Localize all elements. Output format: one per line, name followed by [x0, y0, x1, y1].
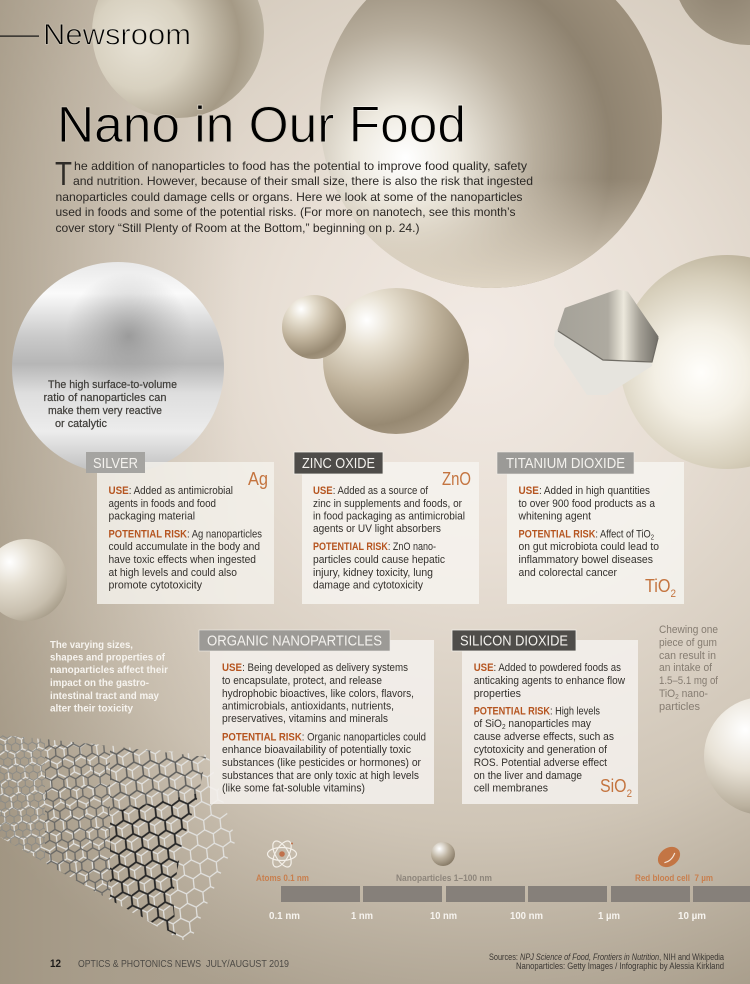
heading: silicon dioxide [452, 630, 576, 651]
text: titanium dioxide use and risk: inflammatory bowel diseases [518, 554, 653, 566]
callout: surface-to-volume: make them very reactive [48, 405, 162, 417]
text: zinc oxide use and risk: in food packaging as antimicrobial [313, 510, 465, 522]
callout: chewing gum: Chewing one [659, 624, 718, 636]
icon: nanoparticle [431, 842, 455, 866]
scale bar [281, 886, 750, 902]
text: silver use and risk: could accumulate in the body and [108, 541, 260, 553]
heading: titanium dioxide: TITANIUM DIOXIDE [506, 456, 625, 472]
text: silicon dioxide use and risk: on the liver and damage [474, 770, 582, 782]
text: silver use and risk: POTENTIAL RISK: Ag nanoparticles [108, 528, 262, 540]
callout: chewing gum: TiO [659, 688, 676, 700]
text: silicon dioxide use and risk [474, 662, 625, 794]
label: atoms: Atoms 0.1 nm [256, 873, 309, 884]
heading: silver [86, 452, 145, 473]
sphere: top right corner [673, 0, 750, 45]
text: organic use and risk [222, 662, 426, 794]
text: organic use and risk: to encapsulate, protect, and release [222, 675, 382, 687]
text: silicon dioxide use and risk: properties [474, 688, 521, 700]
text: organic use and risk: hydrophobic bioactives, like colors, flavors, [222, 688, 414, 700]
text: silver use and risk: USE: Added as antimicrobial [108, 485, 233, 497]
callout: chewing gum: can result in [659, 650, 716, 662]
folio: 12 [50, 958, 61, 970]
heading: silicon dioxide: SILICON DIOXIDE [460, 634, 568, 650]
symbol: TiO2: 2 [670, 588, 676, 600]
callout: varying sizes: The varying sizes, [50, 639, 133, 651]
symbol: TiO2: TiO [645, 576, 673, 596]
folio: OPTICS & PHOTONICS NEWS [78, 959, 201, 970]
symbol: Ag: Ag [248, 469, 268, 489]
callout: varying sizes: intestinal tract and may [50, 690, 159, 702]
text: silicon dioxide use and risk: ROS. Potential adverse effect [474, 757, 607, 769]
text: silver use and risk: packaging material [108, 510, 195, 522]
crystal nanoparticle [556, 291, 658, 393]
text: silver use and risk: promote cytotoxicity [108, 580, 202, 592]
text: zinc oxide use and risk [313, 485, 465, 592]
text: zinc oxide use and risk: injury, kidney toxicity, lung [313, 567, 433, 579]
callout: surface-to-volume [44, 379, 177, 430]
callout: surface-to-volume: The high surface-to-volume [48, 379, 177, 391]
text: organic use and risk: antimicrobials, antioxidants, nutrients, [222, 700, 394, 712]
text: titanium dioxide use and risk: USE: Added in high quantities [518, 485, 650, 497]
scale values: 10 nm [430, 911, 457, 922]
text: silicon dioxide use and risk: of SiO [474, 718, 504, 730]
text: zinc oxide use and risk: agents or UV light absorbers [313, 523, 441, 535]
text: silver use and risk [108, 485, 262, 592]
intro paragraph: used in foods and some of the potential risks. (For more on nanotech, see this month’s [56, 205, 516, 219]
text: titanium dioxide use and risk [518, 485, 659, 579]
credits [489, 952, 724, 971]
callout: chewing gum: piece of gum [659, 637, 717, 649]
text: organic use and risk: preservatives, vitamins and minerals [222, 713, 388, 725]
callout: chewing gum [659, 624, 719, 713]
callout: chewing gum: 1.5–5.1 mg of [659, 675, 719, 687]
scale values: 1 µm [598, 911, 620, 922]
callout: surface-to-volume: ratio of nanoparticles can [44, 392, 166, 404]
text: organic use and risk: enhance bioavailability of potentially toxic [222, 744, 411, 756]
intro paragraph: he addition of nanoparticles to food has the potential to improve food quality, safety [74, 159, 527, 173]
text: silicon dioxide use and risk: 2 [502, 724, 506, 731]
callout: varying sizes: alter their toxicity [50, 702, 133, 714]
sphere: silver [12, 262, 224, 474]
credits: Sources: NPJ Science of Food, Frontiers in Nutrition, NIH and Wikipedia [489, 952, 724, 962]
text: organic use and risk: substances (like pesticides or hormones) or [222, 757, 421, 769]
panel: silver [86, 452, 274, 604]
callout: varying sizes: nanoparticles affect their [50, 664, 168, 676]
scale values [269, 911, 706, 922]
text: silver use and risk: have toxic effects when ingested [108, 554, 256, 566]
text: silicon dioxide use and risk: cell membranes [474, 782, 548, 794]
nanotube [0, 735, 236, 942]
text: titanium dioxide use and risk: whitening agent [518, 510, 591, 522]
text: organic use and risk: substances that are only toxic at high levels [222, 770, 419, 782]
text: titanium dioxide use and risk: to over 900 food products as a [518, 498, 656, 510]
icon: atom [268, 838, 296, 870]
text: silicon dioxide use and risk: POTENTIAL RISK: High levels [474, 706, 600, 718]
sphere: left middle [0, 539, 67, 621]
text: silicon dioxide use and risk: cytotoxicity and generation of [474, 744, 608, 756]
title: Nano in Our Food [57, 96, 466, 153]
heading: zinc oxide: ZINC OXIDE [302, 456, 375, 472]
label: nanoparticles: Nanoparticles 1–100 nm [396, 873, 492, 884]
panel: silicon dioxide [452, 630, 638, 804]
text: silicon dioxide use and risk: anticaking agents to enhance flow [474, 675, 625, 687]
text: silver use and risk: at high levels and could also [108, 567, 237, 579]
sphere: top left [92, 0, 264, 118]
text: titanium dioxide use and risk: POTENTIAL RISK: Affect of TiO [518, 528, 661, 540]
text: zinc oxide use and risk: zinc in supplements and foods, or [313, 498, 462, 510]
callout: chewing gum: particles [659, 701, 700, 713]
callout: chewing gum: nano- [679, 688, 708, 700]
text: organic use and risk: (like some fat-soluble vitamins) [222, 782, 365, 794]
section label: Newsroom: Newsroom [43, 18, 191, 52]
icon: red blood cell [654, 843, 684, 871]
callout: varying sizes: impact on the gastro- [50, 677, 149, 689]
callout: surface-to-volume: or catalytic [55, 418, 107, 430]
text: titanium dioxide use and risk: on gut microbiota could lead to [518, 541, 659, 553]
sphere: small zinc [282, 295, 346, 359]
panel: organic nanoparticles [199, 630, 434, 804]
text: silicon dioxide use and risk: USE: Added to powdered foods as [474, 662, 621, 674]
sphere: right [620, 255, 750, 469]
text: zinc oxide use and risk: damage and cytotoxicity [313, 580, 423, 592]
scale values: 100 nm [510, 911, 543, 922]
text: organic use and risk: POTENTIAL RISK: Organic nanoparticles could [222, 732, 426, 744]
sphere: lower right [704, 697, 750, 815]
intro paragraph: and nutrition. However, because of their small size, there is also the risk that ingested [73, 174, 533, 188]
text: silicon dioxide use and risk: cause adverse effects, such as [474, 731, 614, 743]
text: titanium dioxide use and risk: 2 [651, 534, 654, 542]
text: titanium dioxide use and risk: and colorectal cancer [518, 567, 617, 579]
callout: varying sizes [50, 639, 168, 714]
panel: titanium dioxide [497, 452, 684, 604]
scale values: 10 µm [678, 911, 706, 922]
symbol: SiO2: SiO [600, 776, 630, 796]
size scale [256, 838, 750, 922]
sphere: large zinc [323, 288, 469, 434]
heading: titanium dioxide [497, 452, 634, 474]
callout: chewing gum: 2 [675, 694, 679, 701]
sphere: large centre [320, 0, 662, 288]
heading: organic nanoparticles: ORGANIC NANOPARTICLES [207, 634, 382, 650]
text: zinc oxide use and risk: particles could cause hepatic [313, 554, 445, 566]
intro paragraph: cover story “Still Plenty of Room at the Bottom,” beginning on p. 24.) [56, 221, 420, 235]
text: zinc oxide use and risk: USE: Added as a source of [313, 485, 429, 497]
scale values: 0.1 nm [269, 911, 300, 922]
label: red blood cell: Red blood cell 7 µm [635, 873, 713, 884]
heading: zinc oxide [294, 452, 383, 474]
panel: zinc oxide [294, 452, 479, 604]
text: silver use and risk: agents in foods and food [108, 498, 216, 510]
callout: varying sizes: shapes and properties of [50, 652, 165, 664]
intro paragraph [55, 155, 533, 235]
intro paragraph: T [55, 155, 72, 192]
symbol: ZnO: ZnO [442, 469, 471, 489]
scale values: 1 nm [351, 911, 373, 922]
symbol: SiO2: 2 [627, 788, 632, 800]
folio [50, 958, 289, 970]
intro paragraph: nanoparticles could damage cells or organs. Here we look at some of the nanoparticles [56, 190, 522, 204]
text: zinc oxide use and risk: POTENTIAL RISK: ZnO nano- [313, 541, 436, 553]
callout: chewing gum: an intake of [659, 662, 713, 674]
text: silicon dioxide use and risk: nanoparticles may [506, 718, 591, 730]
heading: silver: SILVER [93, 456, 138, 472]
folio: JULY/AUGUST 2019 [206, 959, 289, 970]
text: organic use and risk: USE: Being developed as delivery systems [222, 662, 408, 674]
